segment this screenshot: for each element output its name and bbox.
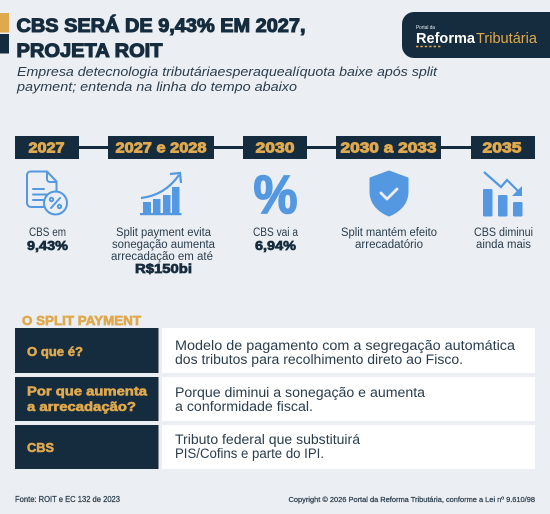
timeline text: 2027 e 2028: R$150bi	[135, 262, 192, 276]
icon: percent sign: %	[254, 165, 298, 225]
table row: Por que aumenta a arrecadação?: a conformidade fiscal.	[175, 399, 313, 414]
table row: O que é?	[15, 328, 535, 373]
subtitle	[16, 64, 439, 94]
timeline text: 2027 e 2028: sonegação aumenta	[112, 239, 216, 251]
timeline connector	[79, 146, 471, 149]
logo: Portal da Reforma Tributária: Portal da	[416, 25, 436, 31]
subtitle: payment; entenda na linha do tempo abaixo	[16, 79, 297, 94]
icon: rising bar chart	[140, 173, 182, 215]
timeline text: 2027 e 2028	[111, 227, 216, 276]
timeline year: 2027	[15, 136, 79, 159]
timeline year: 2027: 2027	[28, 140, 64, 156]
table row: O que é?: Modelo de pagamento com a segregação automática	[175, 338, 516, 353]
timeline text: 2030 a 2033: arrecadatório	[355, 239, 423, 251]
timeline text: 2030 a 2033	[341, 227, 437, 251]
logo: Portal da Reforma Tributária: Reforma	[416, 30, 476, 47]
table row: CBS	[15, 425, 535, 469]
accent bars	[0, 13, 9, 54]
logo: Portal da Reforma Tributária: Tributária	[476, 30, 538, 47]
timeline text: 2027	[27, 227, 68, 253]
timeline text: 2027 e 2028: Split payment evita	[116, 227, 212, 239]
footer: copyright: Copyright © 2026 Portal da Reforma Tributária, conforme a Lei nº 9.610/98	[288, 495, 535, 504]
subtitle: Empresa detecnologia tributáriaesperaquealíquota baixe após split	[17, 64, 439, 79]
table row: Por que aumenta a arrecadação?	[15, 377, 535, 421]
table row: O que é?: O que é?	[27, 344, 83, 359]
table row: Por que aumenta a arrecadação?: Por que aumenta	[27, 384, 148, 398]
icon: shield with check	[370, 171, 408, 216]
timeline year: 2027 e 2028: 2027 e 2028	[116, 140, 206, 156]
title: PROJETA ROIT	[16, 41, 163, 62]
table row: CBS: CBS	[27, 440, 54, 455]
timeline year: 2030 a 2033	[336, 136, 441, 159]
timeline year: 2030: 2030	[256, 140, 294, 156]
logo: Portal da Reforma Tributária	[402, 12, 550, 58]
timeline text: 2030: 6,94%	[255, 239, 296, 253]
timeline text: 2035: ainda mais	[476, 239, 531, 251]
timeline text: 2027 e 2028: arrecadação em até	[111, 251, 213, 263]
table row: CBS: Tributo federal que substituirá	[175, 432, 360, 447]
footer: source: Fonte: ROIT e EC 132 de 2023	[15, 495, 121, 504]
icon: document with percent	[27, 172, 67, 214]
timeline text: 2030 a 2033: Split mantém efeito	[341, 227, 437, 239]
table row: CBS: PIS/Cofins e parte do IPI.	[175, 446, 324, 461]
timeline year: 2035	[471, 136, 535, 159]
timeline text: 2027: CBS em	[29, 227, 66, 239]
timeline year: 2027 e 2028	[108, 136, 214, 159]
timeline year: 2035: 2035	[482, 140, 522, 156]
table row: Por que aumenta a arrecadação?: a arrecadação?	[27, 399, 136, 414]
table row: O que é?: dos tributos para recolhimento direto ao Fisco.	[175, 352, 463, 367]
timeline year: 2030 a 2033: 2030 a 2033	[340, 140, 436, 156]
title: CBS SERÁ DE 9,43% EM 2027,	[16, 15, 306, 37]
timeline year: 2030	[243, 136, 307, 159]
timeline text: 2030	[253, 227, 299, 253]
icon: falling bar chart	[483, 172, 522, 216]
timeline text: 2035	[474, 227, 533, 251]
section heading: O Split Payment: O SPLIT PAYMENT	[22, 313, 141, 328]
timeline text: 2027: 9,43%	[27, 239, 68, 253]
timeline text: 2030: CBS vai a	[253, 227, 299, 239]
table row: Por que aumenta a arrecadação?: Porque diminui a sonegação e aumenta	[175, 385, 426, 400]
timeline text: 2035: CBS diminui	[474, 227, 533, 239]
title	[16, 15, 306, 62]
